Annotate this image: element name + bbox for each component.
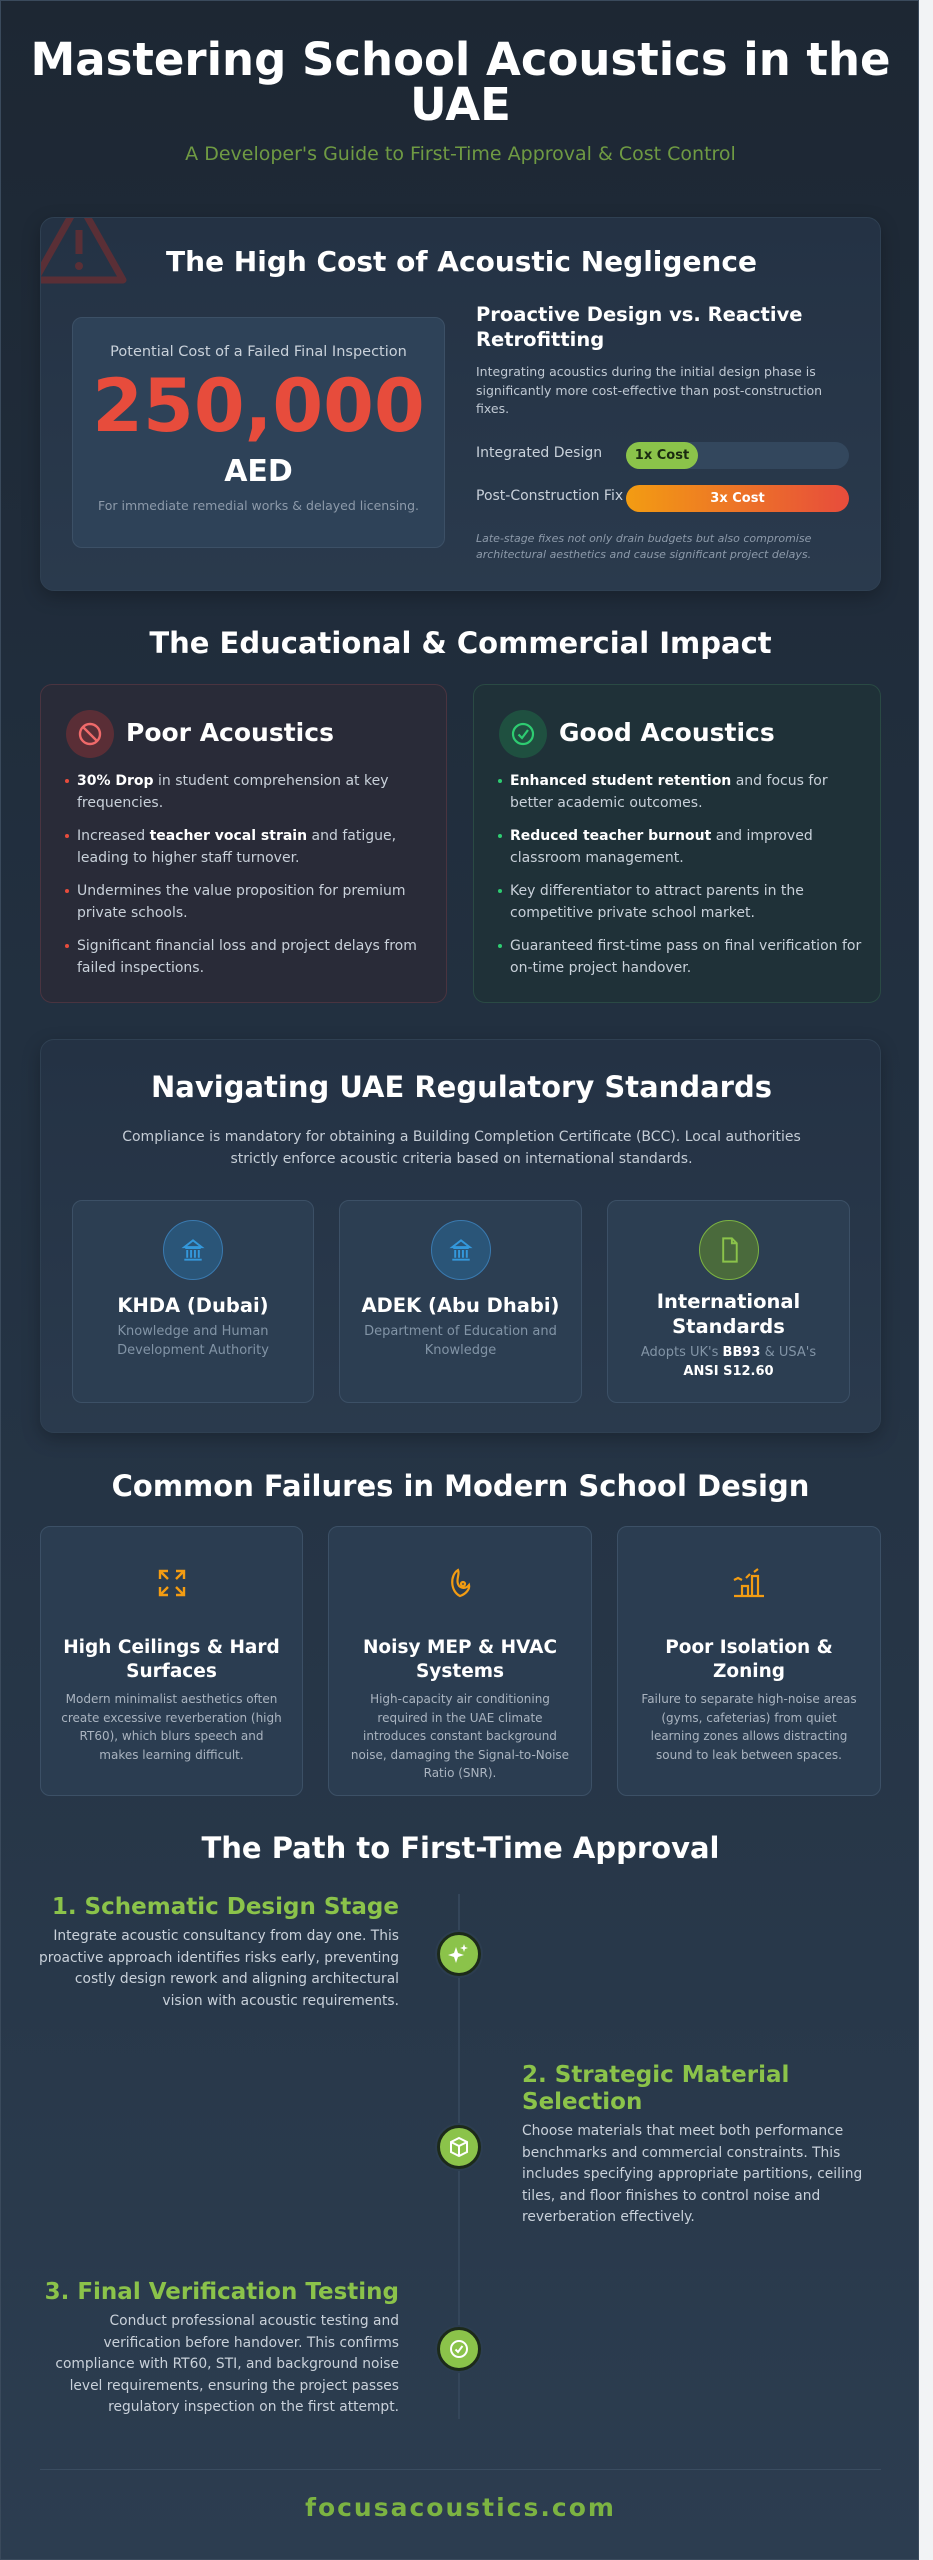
card: international: Adopts UK's BB93 & USA's ANSI S12.60	[641, 1345, 816, 1378]
card title: Poor Acoustics	[126, 718, 334, 747]
card title: Good Acoustics	[559, 718, 775, 747]
icon: check	[499, 710, 547, 758]
panel: good acoustics	[473, 684, 881, 1003]
panel: regulatory	[40, 1039, 881, 1433]
footer: focusacoustics.com	[305, 2493, 616, 2522]
card: KHDA: Knowledge and Human Development Authority	[117, 1324, 269, 1358]
list: 30% Drop in student comprehension at key frequencies.	[77, 773, 388, 811]
icon: building	[163, 1220, 223, 1280]
stat box: Potential Cost of a Failed Final Inspection	[110, 344, 407, 360]
step 3: Conduct professional acoustic testing and verification before handover. This confirms compliance with RT60, STI, and background noise level requirements, ensuring the project passes regulatory inspection on the first attempt.	[55, 2313, 399, 2415]
bar chart: cost: Integrated Design	[476, 444, 602, 460]
card: poor isolation	[617, 1526, 881, 1796]
icon: node 2 cube	[437, 2125, 481, 2169]
panel: high cost	[40, 217, 881, 591]
heading: common failures: Common Failures in Modern School Design	[112, 1469, 809, 1503]
card: international	[607, 1200, 850, 1403]
list: Enhanced student retention and focus for better academic outcomes.	[510, 773, 828, 811]
list: Guaranteed first-time pass on final verification for on-time project handover.	[510, 938, 861, 976]
list	[65, 773, 417, 976]
list: Reduced teacher burnout and improved classroom management.	[510, 828, 813, 866]
card: poor isolation: Poor Isolation & Zoning	[665, 1637, 833, 1682]
icon: buildings	[734, 1568, 764, 1598]
icon: node 3 check	[437, 2327, 481, 2371]
panel: poor acoustics	[40, 684, 447, 1003]
step 1: 1. Schematic Design Stage	[52, 1894, 399, 1920]
step 1: Integrate acoustic consultancy from day one. This proactive approach identifies risks early, preventing costly design rework and aligning architectural vision with acoustic requirements.	[39, 1928, 399, 2008]
title: Mastering School Acoustics in the UAE	[30, 33, 891, 131]
heading: The High Cost of Acoustic Negligence	[166, 245, 757, 278]
step 2: Choose materials that meet both performance benchmarks and commercial constraints. This includes specifying appropriate partitions, ceiling tiles, and floor finishes to control noise and reverberation effectively.	[522, 2123, 862, 2225]
stat box: For immediate remedial works & delayed licensing.	[98, 498, 419, 513]
bar chart: cost: Post-Construction Fix	[476, 488, 623, 504]
bar chart: cost	[476, 442, 849, 512]
list: Significant financial loss and project delays from failed inspections.	[77, 938, 417, 976]
list	[498, 773, 862, 976]
comparison column: Integrating acoustics during the initial design phase is significantly more cost-effective than post-construction fixes.	[476, 364, 822, 416]
subtitle: A Developer's Guide to First-Time Approval & Cost Control	[185, 143, 736, 165]
icon: building	[430, 1220, 490, 1280]
step 3: 3. Final Verification Testing	[45, 2279, 399, 2305]
intro text: Compliance is mandatory for obtaining a Building Completion Certificate (BCC). Local authorities strictly enforce acoustic criteria based on international standards.	[122, 1129, 801, 1167]
step 2: 2. Strategic Material Selection	[522, 2062, 789, 2115]
heading: path: The Path to First-Time Approval	[202, 1831, 719, 1865]
heading: Navigating UAE Regulatory Standards	[151, 1070, 772, 1104]
step 2	[522, 2062, 862, 2225]
list: Key differentiator to attract parents in the competitive private school market.	[510, 883, 804, 921]
list: Undermines the value proposition for premium private schools.	[77, 883, 406, 921]
card: international: International	[657, 1290, 800, 1313]
card: high ceilings: Modern minimalist aesthetics often create excessive reverberation (high RT60), which blurs speech and makes learning difficult.	[61, 1692, 282, 1762]
card: KHDA	[72, 1200, 314, 1403]
card: ADEK: ADEK (Abu Dhabi)	[362, 1294, 559, 1317]
bar chart: cost: 3x Cost	[710, 490, 765, 506]
card: noisy MEP: High-capacity air conditioning required in the UAE climate introduces constant background noise, damaging the Signal-to-Noise Ratio (SNR).	[351, 1692, 569, 1780]
icon: document	[698, 1220, 758, 1280]
card: ADEK	[339, 1200, 582, 1403]
card: ADEK: Department of Education and Knowledge	[364, 1324, 557, 1358]
card: poor isolation: Failure to separate high-noise areas (gyms, cafeterias) from quiet learning zones allows distracting sound to leak between spaces.	[641, 1692, 857, 1762]
icon: prohibited	[66, 710, 114, 758]
stat box	[72, 317, 445, 548]
bar chart: cost: 1x Cost	[635, 448, 689, 462]
icon: node 1 sparkles	[437, 1932, 481, 1976]
list: Increased teacher vocal strain and fatigue, leading to higher staff turnover.	[77, 828, 396, 866]
stat box: 250,000	[92, 364, 425, 449]
icon: expand arrows	[158, 1570, 186, 1596]
icon: fan	[451, 1568, 470, 1598]
comparison column: Late-stage fixes not only drain budgets but also compromise architectural aesthetics and cause significant project delays.	[476, 532, 811, 561]
comparison column: Proactive Design vs. Reactive Retrofitting	[476, 303, 803, 351]
card: noisy MEP: Noisy MEP & HVAC Systems	[363, 1637, 557, 1682]
heading: impact: The Educational & Commercial Impact	[149, 626, 772, 660]
card: international: Standards	[672, 1315, 785, 1338]
card: high ceilings: High Ceilings & Hard Surfaces	[63, 1637, 280, 1682]
card: noisy MEP	[328, 1526, 592, 1796]
card: high ceilings	[40, 1526, 303, 1796]
stat box: AED	[224, 454, 293, 489]
card: KHDA: KHDA (Dubai)	[117, 1294, 269, 1317]
comparison column	[476, 303, 849, 561]
icon: warning triangle	[41, 218, 126, 284]
timeline line	[458, 1894, 460, 2419]
